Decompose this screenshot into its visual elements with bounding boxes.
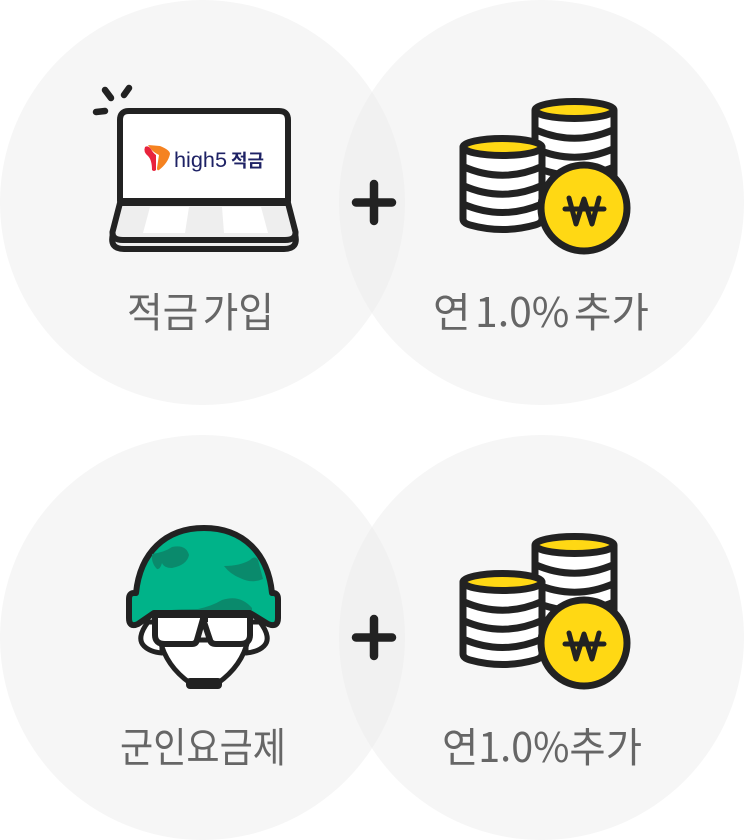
- row 1 circles: [0, 0, 744, 405]
- right ear: [246, 622, 267, 653]
- glasses: [155, 615, 250, 644]
- logo: high5: [174, 149, 227, 172]
- chin strap: [186, 678, 222, 689]
- face: [160, 640, 248, 683]
- plus sign 2: [356, 619, 392, 656]
- left ear: [141, 622, 162, 653]
- label: 연1.0%추가: 연1.0%추가: [442, 714, 642, 774]
- logo: [144, 145, 264, 173]
- icon: won symbol: [565, 633, 604, 659]
- helmet: [129, 528, 278, 625]
- icon: soldier helmet and glasses: [129, 528, 278, 689]
- plus sign 1: [356, 184, 392, 221]
- icon: coin stacks 2: [463, 536, 627, 686]
- camouflage: [152, 546, 263, 610]
- label: 연 1.0% 추가: 연 1.0% 추가: [433, 279, 649, 339]
- icon: sparkle lines: [96, 88, 129, 112]
- icon: won symbol: [565, 198, 604, 224]
- icon: laptop with high5 savings logo: [96, 88, 296, 249]
- icon: coin stacks 1: [463, 102, 627, 251]
- logo: 적금: [231, 147, 264, 173]
- label: 적금 가입: 적금 가입: [127, 279, 274, 339]
- label: 군인요금제: 군인요금제: [120, 714, 286, 774]
- row 2 circles: [0, 435, 744, 840]
